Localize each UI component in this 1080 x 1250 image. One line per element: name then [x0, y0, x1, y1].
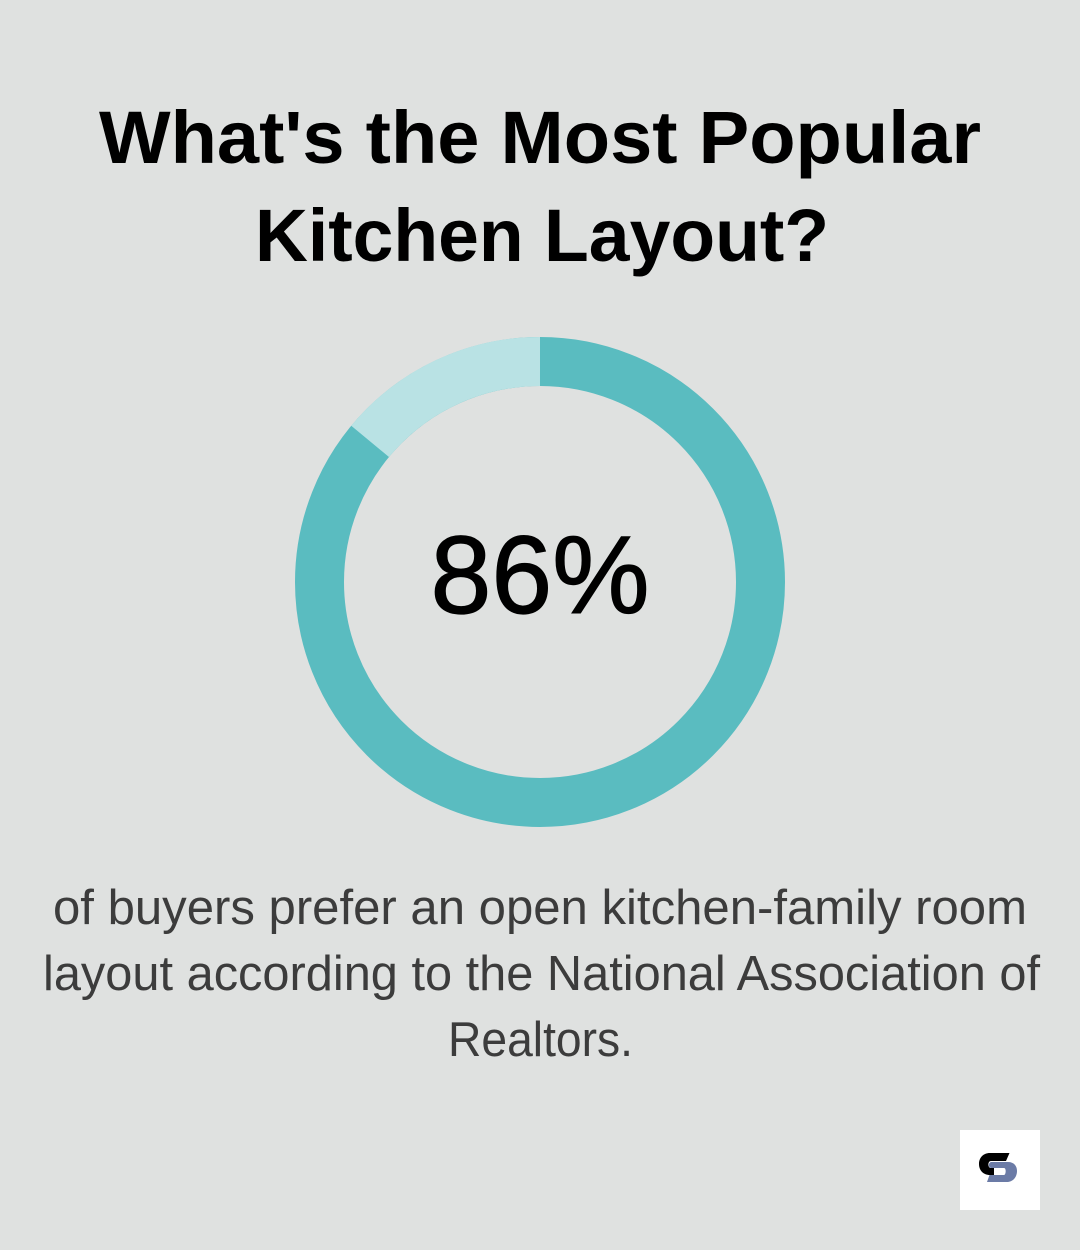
donut value: 86%: [430, 514, 650, 637]
logo badge: [960, 1130, 1040, 1210]
donut chart: 86%: [320, 362, 760, 802]
icon: logo mark: [979, 1153, 1017, 1182]
title: What's the Most Popular: [99, 96, 981, 179]
description text: Realtors.: [448, 1013, 633, 1067]
description text: of buyers prefer an open kitchen-family room: [53, 881, 1027, 935]
description text: layout according to the National Association of: [43, 947, 1040, 1001]
title: [99, 96, 981, 277]
description text: [43, 881, 1040, 1067]
title: Kitchen Layout?: [255, 194, 829, 277]
